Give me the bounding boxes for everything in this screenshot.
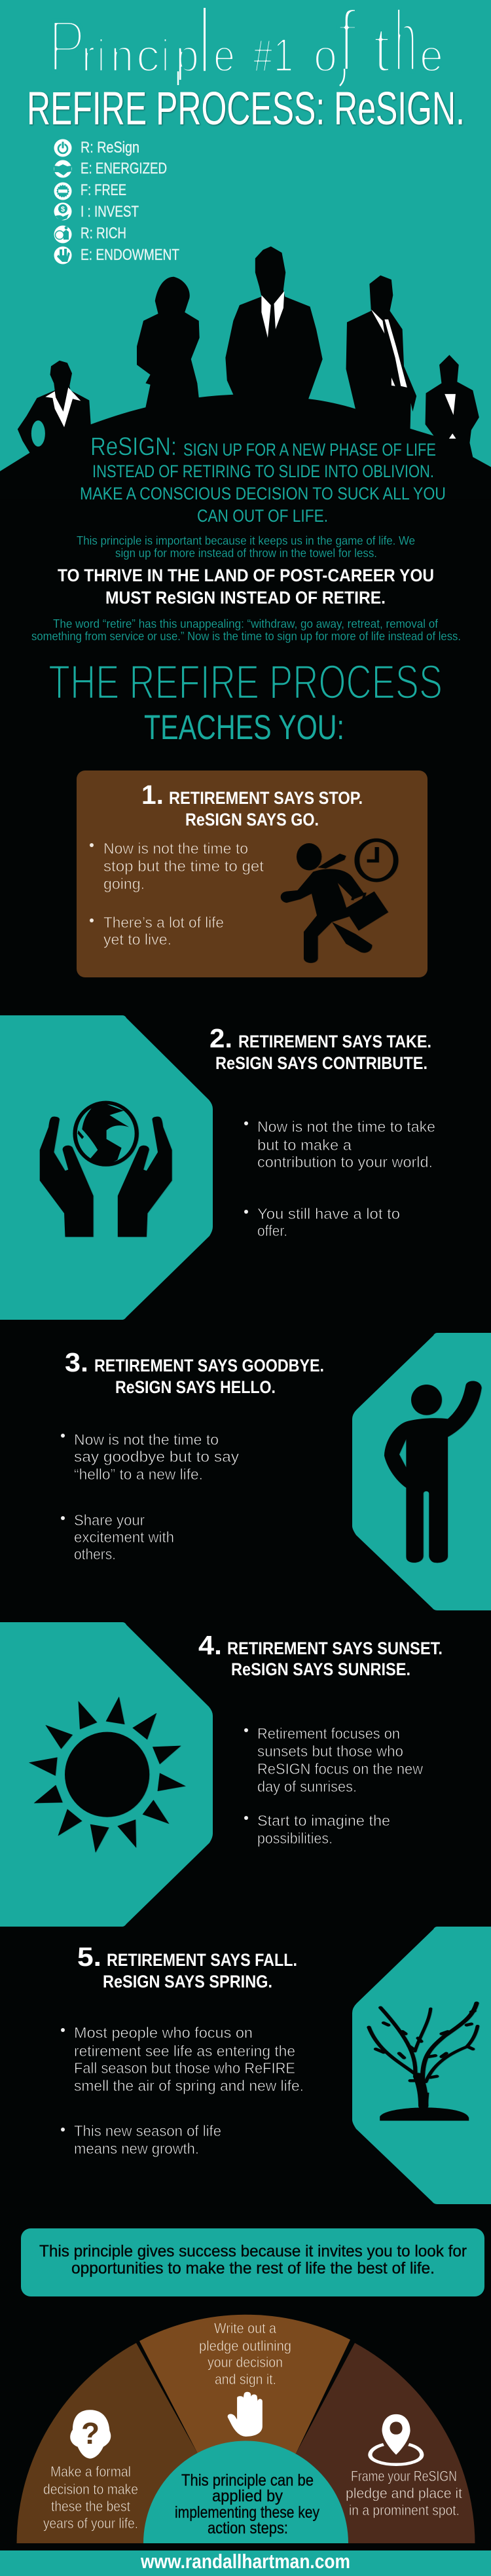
heading: lesson 2: RETIREMENT SAYS TAKE. <box>238 1032 431 1051</box>
text: step 3 <box>346 2468 463 2518</box>
title: Principle #1 of the: t <box>373 13 390 85</box>
panel: lesson 2 teal shape <box>0 1015 213 1320</box>
heading: lesson 2: ReSIGN SAYS CONTRIBUTE. <box>215 1053 427 1073</box>
bullets: lesson 5: means new growth. <box>74 2140 199 2157</box>
bullets: lesson 3: “hello” to a new life. <box>74 1466 203 1483</box>
icon: power <box>54 139 72 157</box>
bullets: lesson 1: stop but the time to get <box>103 858 264 875</box>
label: E Energized: E: ENERGIZED <box>81 160 167 177</box>
footer: website <box>0 2550 491 2576</box>
text: why the principle is important: sign up for more instead of throw in the towel for less. <box>115 547 377 560</box>
panel: action steps intro dome: This principle can be <box>181 2471 314 2490</box>
heading: lesson 4 <box>198 1630 443 1679</box>
text: step 3: in a prominent spot. <box>349 2502 460 2518</box>
heading: lesson 1: ReSIGN SAYS GO. <box>185 810 319 829</box>
callout: thrive statement: MUST ReSIGN INSTEAD OF RETIRE. <box>105 588 386 608</box>
callout: principle gives success: This principle gives success because it invites you to look for <box>39 2242 467 2260</box>
icon: budding tree <box>369 2003 477 2120</box>
icon: endowment hand <box>54 246 72 264</box>
heading: ReSIGN definition <box>80 433 446 526</box>
title: Principle #1 of the: e <box>213 30 235 81</box>
icon: head with question mark <box>70 2410 111 2459</box>
heading: lesson 1 <box>141 780 363 829</box>
step 3: frame your pledge <box>245 2343 475 2543</box>
panel: action steps intro dome: action steps: <box>208 2519 288 2537</box>
heading: ReSIGN definition: CAN OUT OF LIFE. <box>197 506 328 526</box>
bullets: lesson 5: This new season of life <box>74 2122 221 2139</box>
text: step 2: your decision <box>208 2354 283 2370</box>
step 2: write out a pledge <box>139 2315 350 2454</box>
heading: lesson 3 <box>65 1347 324 1397</box>
bullets: lesson 4: day of sunrises. <box>257 1778 357 1795</box>
heading: lesson 3: ReSIGN SAYS HELLO. <box>115 1377 276 1397</box>
title: Principle #1 of the: i <box>98 30 104 81</box>
text: step 1: decision to make <box>43 2481 138 2497</box>
icon: dollar in hand: $ <box>61 206 65 213</box>
heading: lesson 5 <box>77 1942 297 1991</box>
bullets: lesson 1: There’s a lot of life <box>103 914 224 931</box>
title: Principle #1 of the: # <box>253 30 272 81</box>
panel: action steps intro dome <box>143 2441 348 2543</box>
bullets: lesson 1: yet to live. <box>103 931 172 948</box>
bullets: lesson 1: Now is not the time to <box>103 840 248 857</box>
label: R ReSign: R: ReSign <box>81 139 139 156</box>
bullets: lesson 2: You still have a lot to <box>257 1205 400 1222</box>
callout: thrive statement <box>58 566 434 608</box>
bullets: lesson 1: going. <box>103 875 145 892</box>
panel: action steps intro dome: applied by <box>212 2487 283 2505</box>
icon: location pin <box>370 2414 422 2465</box>
bullets: lesson 5: smell the air of spring and new life. <box>74 2077 304 2094</box>
panel: lesson 4 teal shape <box>0 1622 213 1927</box>
label: E Endowment: E: ENDOWMENT <box>81 246 179 264</box>
text: meaning of retire <box>31 617 461 643</box>
heading: lesson 1: RETIREMENT SAYS STOP. <box>169 788 363 808</box>
bullets: lesson 3 <box>61 1431 239 1563</box>
title: Principle #1 of the: n <box>111 30 134 81</box>
text: step 2: and sign it. <box>215 2371 276 2387</box>
panel: lesson 5 teal shape <box>352 1927 491 2204</box>
heading: lesson 2 <box>209 1023 431 1073</box>
text: meaning of retire: The word “retire” has this unappealing: “withdraw, go away, retreat, removal of <box>53 617 439 630</box>
bullets: lesson 5: Most people who focus on <box>74 2024 253 2041</box>
panel: lesson 1 <box>77 771 427 977</box>
icon: sun <box>29 1697 186 1853</box>
heading: ReSIGN definition: SIGN UP FOR A NEW PHASE OF LIFE <box>183 440 436 460</box>
bullets: lesson 4: sunsets but those who <box>257 1743 403 1760</box>
icon: running man with clock <box>281 840 396 963</box>
bullets: lesson 2 <box>244 1118 435 1239</box>
bullets: lesson 3: Share your <box>74 1512 145 1529</box>
heading: ReSIGN definition: ReSIGN: <box>90 433 177 461</box>
bullets: lesson 4: ReSIGN focus on the new <box>257 1760 424 1777</box>
icon: hands holding globe <box>40 1101 172 1237</box>
bullets: lesson 3: excitement with <box>74 1529 174 1546</box>
title: Principle #1 of the: i <box>162 30 168 81</box>
bullets: lesson 2: Now is not the time to take <box>257 1118 435 1135</box>
heading: Teaches You: TEACHES YOU: <box>144 708 344 747</box>
text: why the principle is important <box>77 534 415 560</box>
heading: lesson 4: 4. <box>198 1630 222 1660</box>
callout: thrive statement: TO THRIVE IN THE LAND OF POST-CAREER YOU <box>58 566 434 585</box>
bullets: lesson 4: Start to imagine the <box>257 1812 390 1829</box>
bullets: lesson 5: Fall season but those who ReFIRE <box>74 2059 295 2077</box>
panel: action steps intro dome: implementing these key <box>175 2503 319 2522</box>
bullets: lesson 2: offer. <box>257 1222 287 1239</box>
icon: rich person <box>54 225 72 244</box>
bullets: lesson 3: Now is not the time to <box>74 1431 219 1448</box>
heading: lesson 4: RETIREMENT SAYS SUNSET. <box>227 1639 443 1658</box>
title: Principle #1 of the: o <box>314 30 337 81</box>
callout: principle gives success: opportunities to make the rest of life the best of life. <box>71 2259 435 2277</box>
heading: lesson 2: 2. <box>209 1023 232 1053</box>
text: step 2 <box>199 2320 291 2387</box>
silhouettes: business people on black dome <box>0 246 491 499</box>
heading: lesson 5: RETIREMENT SAYS FALL. <box>107 1950 297 1970</box>
text: step 2: Write out a <box>214 2320 276 2336</box>
text: why the principle is important: This principle is important because it keeps us in the game of life. We <box>77 534 415 547</box>
title: Principle #1 of the: 1 <box>274 29 293 82</box>
text: step 1: years of your life. <box>43 2515 138 2531</box>
text: step 3: Frame your ReSIGN <box>351 2468 457 2484</box>
title: Principle #1 of the: P <box>48 5 85 87</box>
bullets: lesson 4: Retirement focuses on <box>257 1725 400 1742</box>
chart: action steps semicircle <box>17 2315 475 2543</box>
heading: lesson 5: ReSIGN SAYS SPRING. <box>103 1972 272 1991</box>
bullets: lesson 2: but to make a <box>257 1136 352 1153</box>
heading: lesson 4: ReSIGN SAYS SUNRISE. <box>231 1660 410 1679</box>
title: Principle #1 of the: r <box>82 30 95 81</box>
title: Principle #1 of the: e <box>420 30 443 81</box>
title: Principle #1 of the: c <box>136 30 160 81</box>
text: step 1: these the best <box>51 2498 131 2514</box>
title: Principle #1 of the <box>48 0 443 90</box>
bullets: lesson 4: possibilities. <box>257 1830 333 1847</box>
callout: principle gives success <box>21 2228 484 2296</box>
label: F Free: F: FREE <box>81 181 126 199</box>
icon: head with question mark: ? <box>81 2416 100 2450</box>
label: R Rich: R: RICH <box>81 225 126 242</box>
label: I Invest: I : INVEST <box>81 203 139 221</box>
bullets: lesson 3: others. <box>74 1546 116 1563</box>
footer: website: www.randallhartman.com <box>140 2550 350 2573</box>
list: REFIRE acronym <box>54 139 179 264</box>
text: step 1 <box>43 2463 138 2531</box>
text: meaning of retire: something from service or use.” Now is the time to sign up for more of life instead of less. <box>31 630 461 643</box>
bullets: lesson 2: contribution to your world. <box>257 1153 433 1170</box>
bullets: lesson 5: retirement see life as entering the <box>74 2042 295 2059</box>
panel: lesson 3 teal shape <box>352 1333 491 1610</box>
heading: ReSIGN definition: MAKE A CONSCIOUS DECISION TO SUCK ALL YOU <box>80 484 446 503</box>
icon: waving person <box>384 1381 482 1563</box>
icon: dollar in hand <box>54 203 72 221</box>
bullets: lesson 5 <box>61 2024 304 2157</box>
text: step 1: Make a formal <box>50 2463 131 2480</box>
bullets: lesson 1 <box>90 840 264 948</box>
icon: free badge <box>54 182 72 200</box>
heading: lesson 5: 5. <box>77 1942 101 1972</box>
step 1: make a formal decision <box>17 2343 245 2543</box>
icon: raised hand <box>228 2392 263 2437</box>
heading: lesson 3: RETIREMENT SAYS GOODBYE. <box>94 1356 324 1375</box>
bullets: lesson 3: say goodbye but to say <box>74 1448 239 1465</box>
text: step 3: pledge and place it <box>346 2485 463 2501</box>
panel: teal header background <box>0 0 491 498</box>
title: Principle #1 of the: p <box>175 30 199 81</box>
icon: handshake <box>54 160 72 178</box>
bullets: lesson 4 <box>244 1725 424 1847</box>
text: step 2: pledge outlining <box>199 2338 291 2354</box>
heading: lesson 3: 3. <box>65 1347 88 1377</box>
heading: lesson 1: 1. <box>141 780 164 810</box>
